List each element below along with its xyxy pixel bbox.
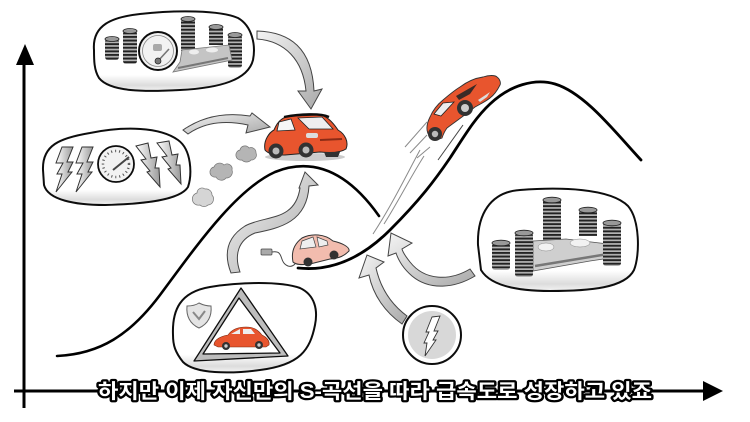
subtitle caption: 하지만 이제 자신만의 S-곡선을 따라 급속도로 성장하고 있죠 (98, 380, 652, 403)
bubble: money and fuel gauge (94, 11, 254, 91)
bubble: power and speed (43, 129, 190, 205)
lightning bolts (56, 141, 181, 192)
y axis (16, 44, 34, 408)
sports car (427, 76, 500, 141)
electric car with plug (261, 235, 349, 266)
banknotes (173, 45, 232, 72)
arrow: power to car (183, 113, 270, 134)
red compact car (265, 114, 347, 161)
coin stacks (105, 16, 242, 68)
warning triangle (194, 288, 288, 361)
x axis (14, 381, 723, 401)
arrow: cost to car (257, 31, 322, 109)
second S-curve (298, 82, 641, 269)
shield icon (187, 303, 211, 328)
circle: lightning bolt (403, 306, 461, 364)
red sedan (214, 327, 269, 350)
speed lines (373, 122, 463, 234)
arrow: safety to first curve (227, 172, 318, 273)
speedometer (98, 146, 134, 182)
first S-curve (57, 166, 379, 356)
arrow: charging to second curve (359, 255, 407, 324)
exhaust puffs (192, 146, 256, 207)
banknotes (533, 239, 610, 271)
fuel gauge (139, 32, 177, 70)
coin stacks (492, 197, 621, 277)
bubble: money stacks (478, 189, 638, 291)
bubble: safety triangle (173, 283, 316, 372)
arrow: cost to second curve (388, 233, 475, 286)
